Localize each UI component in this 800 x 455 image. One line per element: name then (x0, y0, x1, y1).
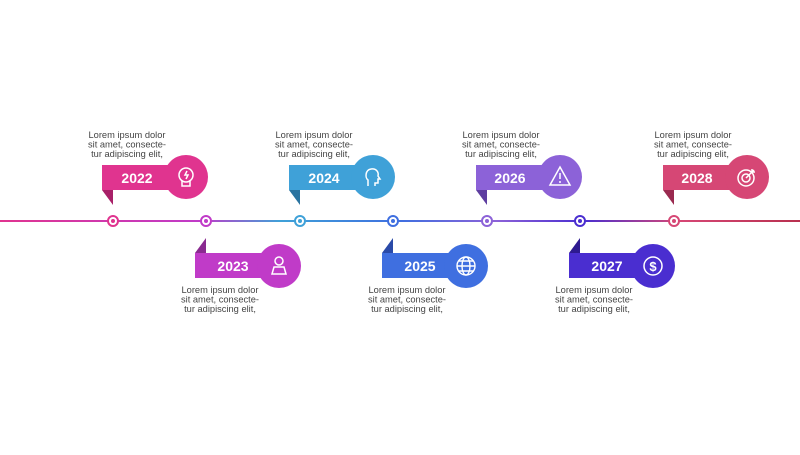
item 2027 (555, 238, 675, 314)
item 2025: Lorem ipsum dolor (368, 285, 446, 295)
item 2025: 2025 (404, 258, 436, 274)
icon: warning (550, 167, 570, 185)
item 2024: Lorem ipsum dolor (276, 130, 352, 140)
item 2025: sit amet, consecte- (368, 294, 446, 304)
item 2026: 2026 (494, 170, 526, 186)
item 2024 (275, 130, 395, 205)
icon: head (366, 169, 380, 186)
icon: bulb (179, 168, 193, 186)
item 2023: sit amet, consecte- (181, 294, 259, 304)
item 2023: tur adipiscing elit, (184, 304, 256, 314)
item 2023 (181, 238, 301, 314)
item 2026: Lorem ipsum dolor (462, 130, 540, 140)
item 2022: 2022 (121, 170, 153, 186)
icon: person (272, 257, 286, 274)
item 2026 (462, 130, 582, 205)
item 2027: tur adipiscing elit, (558, 304, 630, 314)
item 2028 (654, 130, 769, 205)
item 2028: tur adipiscing elit, (657, 149, 729, 159)
item 2023: 2023 (217, 258, 249, 274)
item 2026: sit amet, consecte- (462, 140, 540, 150)
timeline line (0, 220, 800, 222)
item 2028: 2028 (681, 170, 713, 186)
item 2027: 2027 (591, 258, 623, 274)
item 2023: Lorem ipsum dolor (182, 285, 258, 295)
item 2027: Lorem ipsum dolor (556, 285, 632, 295)
item 2028: sit amet, consecte- (654, 140, 732, 150)
item 2027: sit amet, consecte- (555, 294, 633, 304)
item 2022: Lorem ipsum dolor (88, 130, 166, 140)
icon: dollar: $ (649, 259, 657, 274)
item 2025 (368, 238, 488, 314)
item 2026: tur adipiscing elit, (465, 149, 537, 159)
item 2024: tur adipiscing elit, (278, 149, 350, 159)
icon: target (738, 169, 755, 186)
timeline nodes (108, 216, 679, 226)
item 2024: 2024 (308, 170, 340, 186)
item 2024: sit amet, consecte- (275, 140, 353, 150)
item 2022: tur adipiscing elit, (91, 149, 163, 159)
icon: globe (457, 257, 475, 275)
item 2025: tur adipiscing elit, (371, 304, 443, 314)
item 2028: Lorem ipsum dolor (654, 130, 732, 140)
item 2022 (88, 130, 208, 205)
item 2022: sit amet, consecte- (88, 140, 166, 150)
